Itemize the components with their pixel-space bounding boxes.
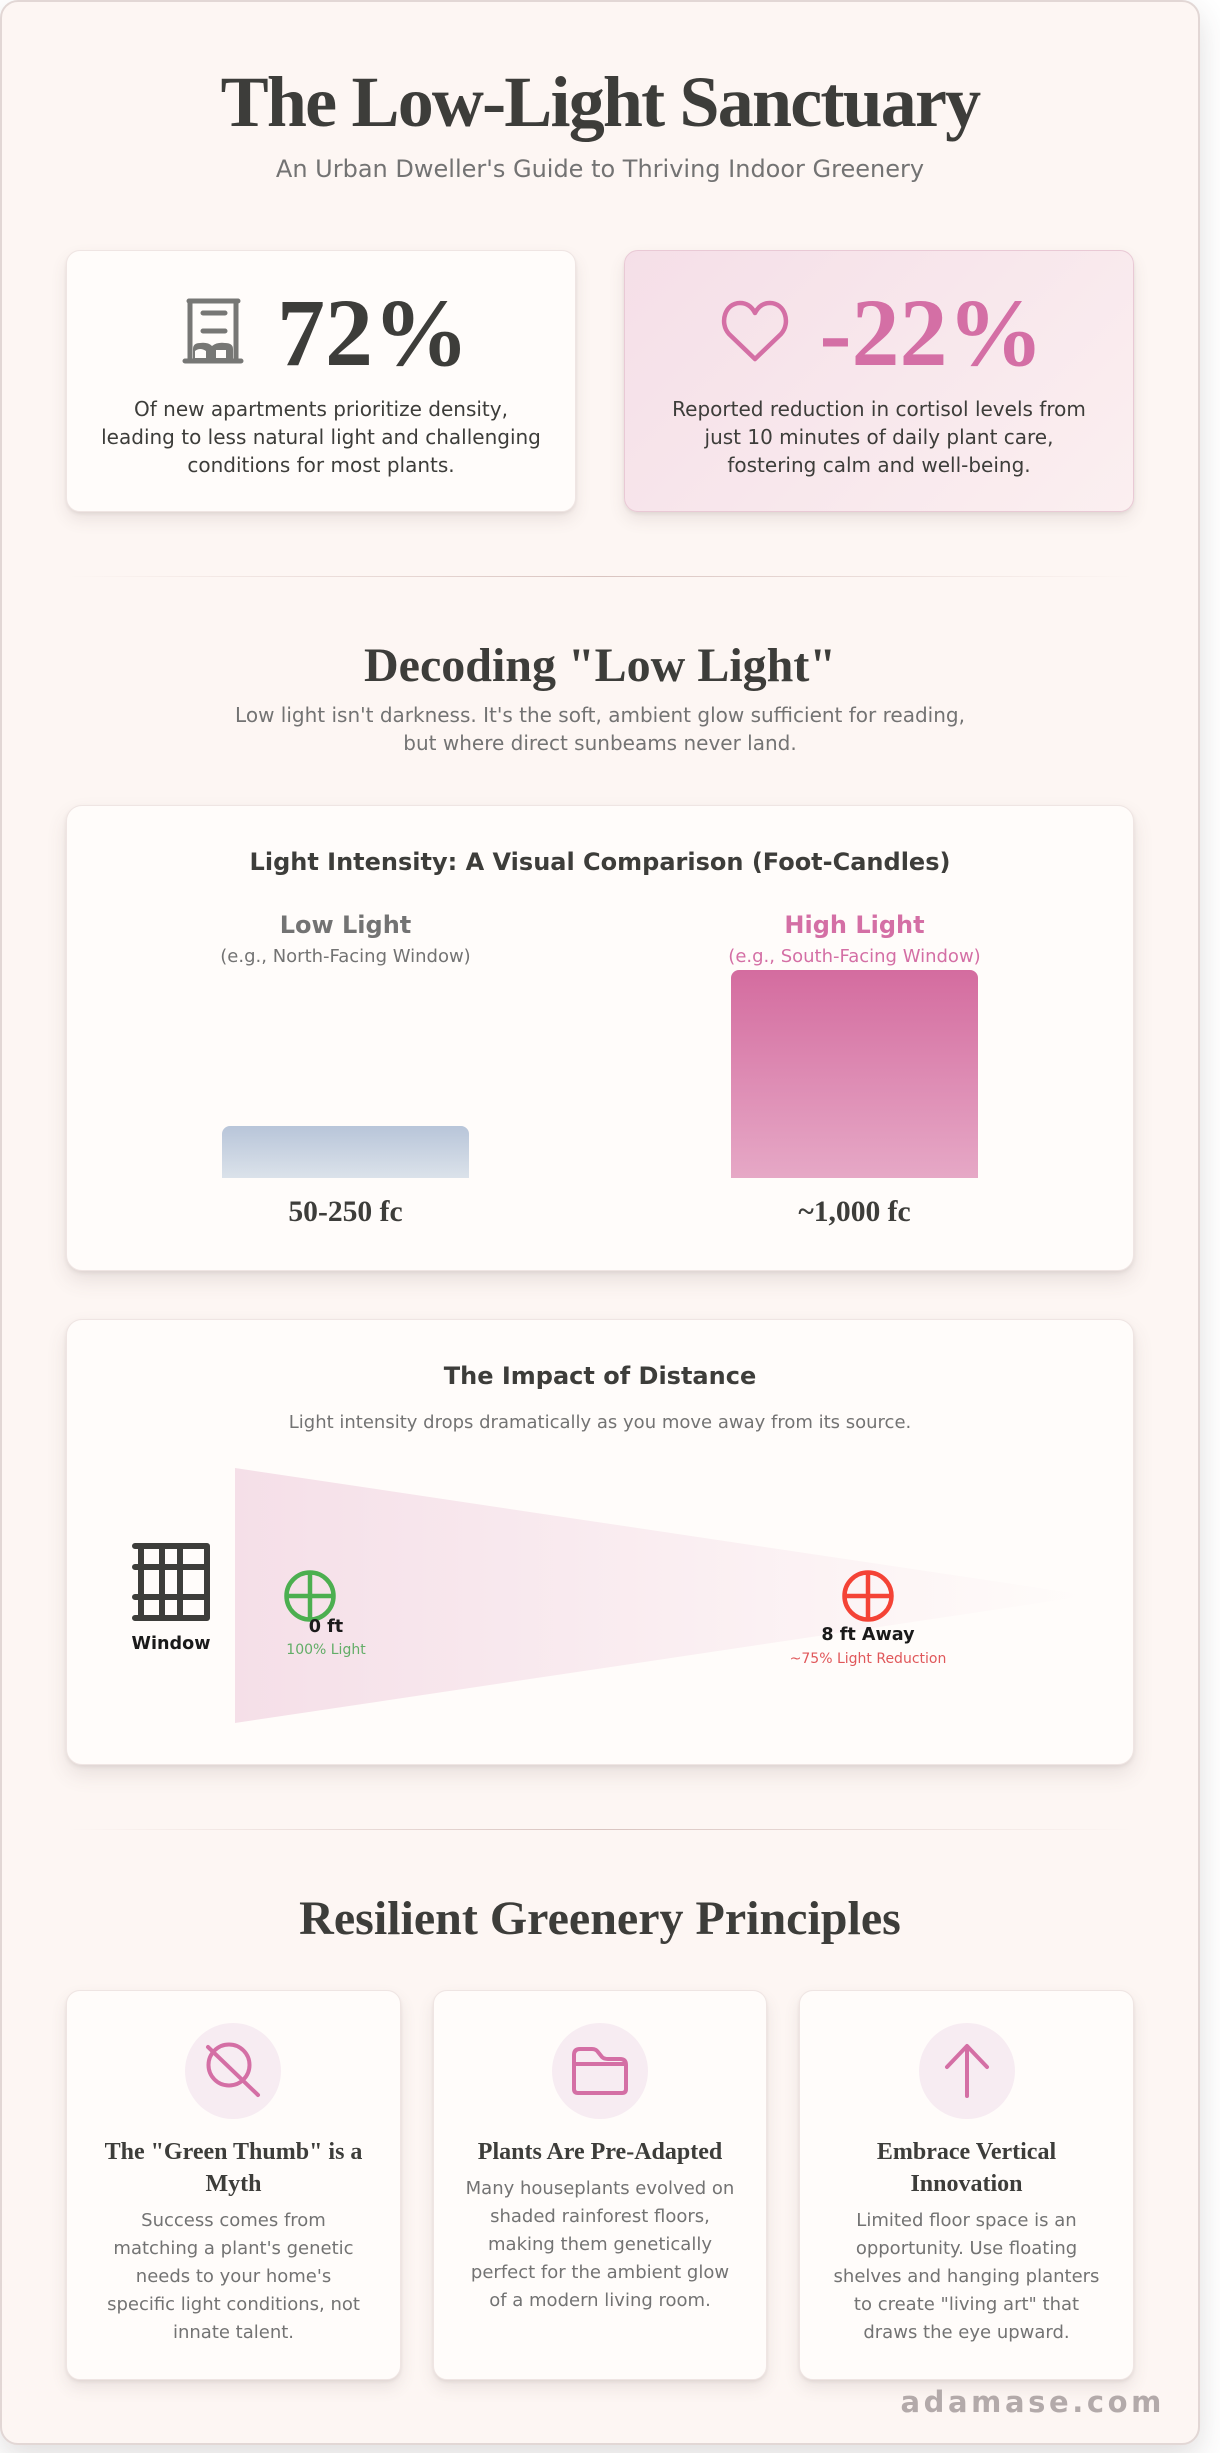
card text: pre-adapted: making them genetically <box>488 2234 712 2255</box>
chart title: Light Intensity: A Visual Comparison (Foot-Candles) <box>250 848 950 876</box>
text: cortisol description: just 10 minutes of daily plant care, <box>705 425 1053 449</box>
label: north-facing: (e.g., North-Facing Window) <box>220 946 471 967</box>
label: low light: Low Light <box>280 911 411 939</box>
card text: pre-adapted: Many houseplants evolved on <box>466 2178 734 2199</box>
text: low light definition <box>235 703 965 755</box>
icon: arrow up <box>944 2044 990 2098</box>
subtitle: An Urban Dweller's Guide to Thriving Indoor Greenery <box>276 155 924 183</box>
stat: -22%: -22% <box>820 279 1043 386</box>
text: density description: leading to less natural light and challenging <box>101 425 541 449</box>
card text: vertical: shelves and hanging planters <box>834 2266 1099 2287</box>
card text: pre-adapted: shaded rainforest floors, <box>490 2206 710 2227</box>
marker: 8 ft <box>842 1570 894 1622</box>
card text: green thumb: innate talent. <box>173 2322 294 2343</box>
card text: vertical: draws the eye upward. <box>863 2322 1070 2343</box>
text: density description <box>101 397 541 477</box>
title: The Low-Light Sanctuary <box>221 62 979 142</box>
label: light reduction: ~75% Light Reduction <box>790 1651 946 1667</box>
value: 1000 fc: ~1,000 fc <box>798 1196 911 1228</box>
card title: green thumb: Myth <box>206 2171 262 2197</box>
icon circle: green thumb <box>185 2023 281 2119</box>
label: 8 ft away: 8 ft Away <box>821 1625 915 1645</box>
label: 0 ft: 0 ft <box>309 1617 343 1637</box>
text: cortisol description <box>672 397 1086 477</box>
panel: cortisol stat <box>624 250 1134 512</box>
card text: green thumb: Success comes from <box>141 2210 326 2231</box>
card title: vertical: Innovation <box>910 2171 1023 2197</box>
icon: window <box>132 1543 210 1621</box>
card text: vertical: opportunity. Use floating <box>856 2238 1077 2259</box>
card text: pre-adapted: perfect for the ambient glow <box>471 2262 729 2283</box>
icon: no symbol <box>206 2042 260 2098</box>
heading: decoding low light: Decoding "Low Light" <box>364 639 836 692</box>
heading: resilient greenery principles: Resilient Greenery Principles <box>299 1892 901 1945</box>
text: low light definition: but where direct sunbeams never land. <box>403 731 797 755</box>
card text: vertical: to create "living art" that <box>854 2294 1079 2315</box>
watermark: adamase.com <box>900 2385 1165 2419</box>
text: density description: conditions for most plants. <box>187 453 455 477</box>
panel: density stat <box>66 250 576 512</box>
card title: green thumb: The "Green Thumb" is a <box>105 2139 362 2165</box>
label: high light: High Light <box>784 911 925 939</box>
label: window: Window <box>132 1634 210 1654</box>
light cone <box>235 1468 852 1723</box>
card text: pre-adapted <box>466 2178 734 2311</box>
text: density description: Of new apartments prioritize density, <box>134 397 508 421</box>
text: low light definition: Low light isn't darkness. It's the soft, ambient glow sufficient for reading, <box>235 703 965 727</box>
bar: low light <box>222 1126 469 1178</box>
card text: green thumb: matching a plant's genetic <box>113 2238 354 2259</box>
card title: pre-adapted: Plants Are Pre-Adapted <box>478 2139 722 2165</box>
panel: pre-adapted <box>433 1990 767 2380</box>
card title: vertical: Embrace Vertical <box>877 2139 1056 2165</box>
label: 100% light: 100% Light <box>286 1642 366 1658</box>
card text: vertical <box>834 2210 1099 2343</box>
card title: green thumb <box>105 2139 362 2197</box>
marker: 0 ft <box>284 1570 336 1622</box>
distance title: The Impact of Distance <box>444 1362 756 1390</box>
panel: impact of distance <box>66 1319 1134 1765</box>
label: south-facing: (e.g., South-Facing Window) <box>728 946 981 967</box>
icon: heart <box>722 300 788 362</box>
card text: vertical: Limited floor space is an <box>856 2210 1077 2231</box>
card text: green thumb: needs to your home's <box>136 2266 331 2287</box>
distance subtitle: Light intensity drops dramatically as you move away from its source. <box>289 1412 911 1433</box>
icon circle: vertical <box>919 2023 1015 2119</box>
panel: light intensity comparison <box>66 805 1134 1271</box>
stat: 72%: 72% <box>277 279 469 386</box>
bar: high light <box>731 970 978 1178</box>
value: 50-250 fc: 50-250 fc <box>288 1196 403 1228</box>
card text: pre-adapted: of a modern living room. <box>489 2290 711 2311</box>
icon: building <box>182 298 244 364</box>
card title: vertical <box>877 2139 1056 2197</box>
text: cortisol description: Reported reduction in cortisol levels from <box>672 397 1086 421</box>
card text: green thumb: specific light conditions, not <box>107 2294 360 2315</box>
panel: green thumb <box>66 1990 401 2380</box>
icon: folder <box>572 2047 628 2095</box>
icon circle: pre-adapted <box>552 2023 648 2119</box>
text: cortisol description: fostering calm and well-being. <box>727 453 1031 477</box>
card text: green thumb <box>107 2210 360 2343</box>
panel: vertical innovation <box>799 1990 1134 2380</box>
